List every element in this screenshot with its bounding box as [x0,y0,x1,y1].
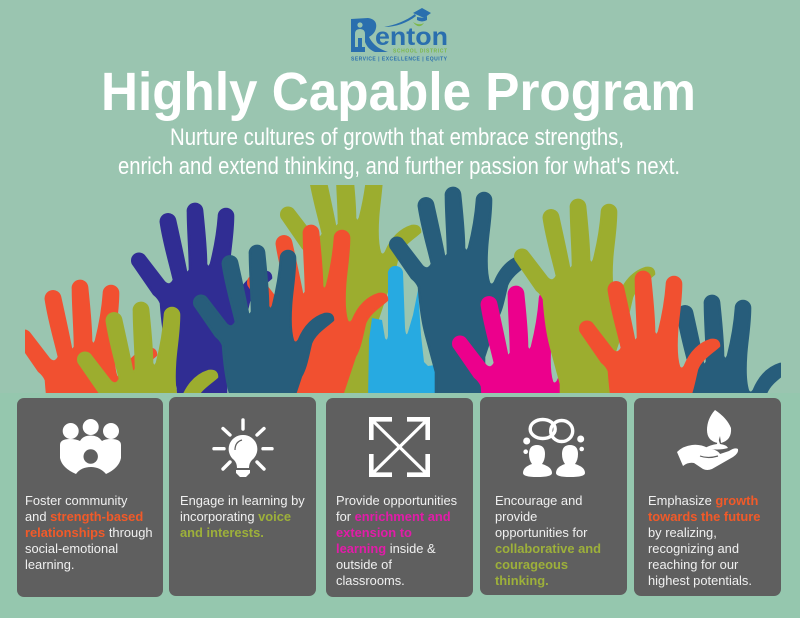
text: growth: towards the future [648,508,760,524]
panel: community [17,398,163,597]
title: Highly Capable Program [101,62,696,122]
text: collaboration: Encourage and [495,492,582,508]
text: voice and interests: Engage in learning by [180,492,305,508]
hand: olive left [77,302,218,393]
logo: graduation cap and swoosh [384,8,431,27]
text: enrichment: outside of [336,556,392,572]
panel: growth [634,398,781,596]
subtitle: enrich and extend thinking, and further passion for what's next. [118,153,680,180]
text: enrichment: learning inside & [336,540,436,556]
logo: Renton School District [351,8,448,62]
text: community: and strength-based [25,508,143,524]
logo: wordmark: enton [375,23,448,51]
hand: purple [131,202,272,393]
text: growth: recognizing and [648,540,739,556]
subtitle [118,124,680,180]
icon: expand arrows [371,419,428,475]
text: enrichment [336,492,457,588]
hand: magenta [452,286,560,393]
text: growth: by realizing, [648,524,717,540]
icon: hand holding seedling [677,410,738,470]
text: collaboration: provide [495,508,537,524]
text: voice and interests: incorporating voice [180,508,291,524]
text: enrichment: classrooms. [336,572,405,588]
text: enrichment: for enrichment and [336,508,451,524]
hand: teal center-left [193,244,334,393]
text: collaboration: opportunities for [495,524,587,540]
subtitle: Nurture cultures of growth that embrace strengths, [170,124,624,151]
text: growth: Emphasize growth [648,492,758,508]
text: community [25,492,153,572]
panel: collaboration [480,397,627,595]
logo: tagline: SERVICE | EXCELLENCE | EQUITY [351,56,448,62]
icon: community group [60,419,121,474]
raised hands illustration [25,185,781,393]
hand: orange left [25,280,158,393]
text: community: social-emotional [25,540,118,556]
hand: orange right [579,270,720,393]
icon: light bulb [214,420,272,477]
hand: olive right [514,198,656,393]
text: growth [648,492,760,588]
text: collaboration: courageous [495,556,568,572]
text: collaboration: collaborative and [495,540,601,556]
text: enrichment: Provide opportunities [336,492,457,508]
hand: olive back [280,185,422,393]
text: voice and interests: and interests. [180,524,264,540]
hand: teal tall [389,186,522,393]
text: growth: reaching for our [648,556,738,572]
text: community: Foster community [25,492,127,508]
panel: enrichment [326,398,473,597]
text: growth: highest potentials. [648,572,752,588]
text: community: learning. [25,556,74,572]
text: community: relationships through [25,524,153,540]
icon: collaborating people [523,420,585,477]
panel: voice and interests [169,397,316,596]
logo: district name: SCHOOL DISTRICT [393,48,447,54]
text: voice and interests [180,492,305,540]
text: enrichment: extension to [336,524,412,540]
hand: orange center [247,224,388,393]
logo: R mark [351,18,388,52]
text: collaboration [495,492,601,588]
hand: cyan [368,266,436,400]
text: collaboration: thinking. [495,572,549,588]
hand: teal far right [678,294,781,393]
